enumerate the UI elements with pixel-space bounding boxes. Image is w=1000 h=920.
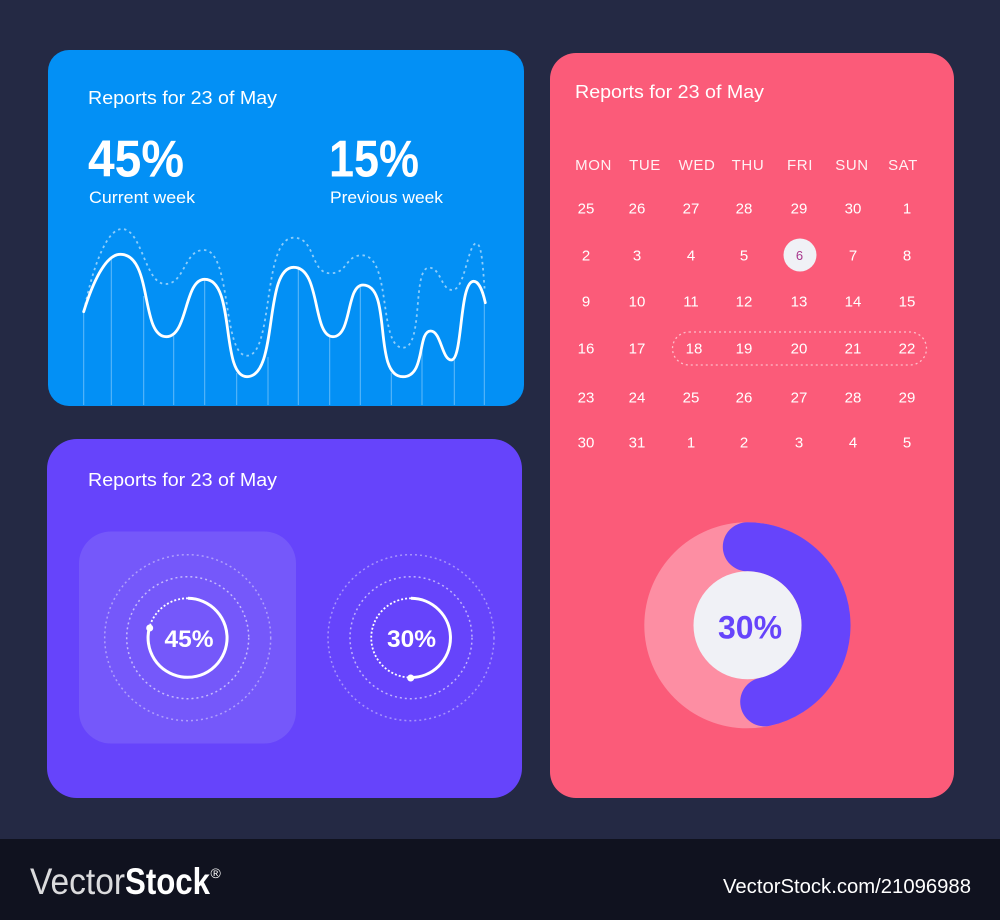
selected day marker xyxy=(784,238,816,272)
heading: purple panel: Reports for 23 of May xyxy=(88,470,277,490)
dates: 23 xyxy=(578,390,594,406)
weekday header: FRI xyxy=(787,157,813,174)
dates: 21 xyxy=(845,340,861,358)
stat: current week: Current week xyxy=(89,189,196,207)
heading: pink panel: Reports for 23 of May xyxy=(575,82,764,102)
dates: 26 xyxy=(629,200,645,218)
gauge: 30% xyxy=(328,555,494,721)
dates: 7 xyxy=(849,248,857,264)
weekday header: SAT xyxy=(888,157,918,174)
footer logo: Stock xyxy=(125,861,210,902)
stat: current week: 45% xyxy=(88,131,184,189)
dates: 12 xyxy=(736,294,752,310)
dates: 15 xyxy=(899,294,915,310)
weekday header: WED xyxy=(679,157,715,174)
stat: previous week xyxy=(329,131,444,207)
dates: 13 xyxy=(791,294,807,310)
dates: 8 xyxy=(903,248,911,264)
gauge: 30%: 30% xyxy=(387,626,436,653)
heading: blue panel: Reports for 23 of May xyxy=(88,88,277,108)
dates: 30 xyxy=(845,200,861,218)
dates: 22 xyxy=(899,340,915,358)
panel: blue line chart report xyxy=(48,50,524,406)
weekday header: TUE xyxy=(629,157,661,174)
dates: 27 xyxy=(791,390,807,406)
dates: 4 xyxy=(687,248,695,264)
registered mark: ® xyxy=(210,865,222,881)
dates: 31 xyxy=(629,434,645,452)
dates: 3 xyxy=(633,248,641,264)
stat: previous week: 15% xyxy=(329,131,419,189)
dates: 29 xyxy=(791,200,807,218)
footer logo: Vector xyxy=(30,861,125,902)
dates: 10 xyxy=(629,294,645,310)
line chart xyxy=(84,229,485,405)
dates: 4 xyxy=(849,434,857,452)
dates: 3 xyxy=(795,434,803,452)
dates: 20 xyxy=(791,340,807,358)
dates: 27 xyxy=(683,200,699,218)
dates: 25 xyxy=(683,390,699,406)
dates: 5 xyxy=(903,434,911,452)
footer logo xyxy=(30,861,210,902)
weekday header: SUN xyxy=(835,157,869,174)
dates: 29 xyxy=(899,390,915,406)
highlighted tile xyxy=(79,532,296,744)
panel: purple radial gauges xyxy=(47,439,522,798)
dates: 28 xyxy=(845,390,861,406)
dates: 17 xyxy=(629,340,645,358)
dates: 16 xyxy=(578,340,594,358)
weekday header xyxy=(575,157,918,174)
gauge: 45%: 45% xyxy=(164,626,214,653)
dates: 2 xyxy=(582,248,590,264)
weekday header: THU xyxy=(732,157,764,174)
dates: 14 xyxy=(845,294,861,310)
calendar xyxy=(575,157,926,452)
selected range outline xyxy=(672,332,926,365)
dates: 25 xyxy=(578,200,594,218)
selected day marker: 6 xyxy=(796,248,803,263)
weekday header: MON xyxy=(575,157,612,174)
footer id text: VectorStock.com/21096988 xyxy=(723,876,971,898)
dates: 9 xyxy=(582,294,590,310)
dates: 2 xyxy=(740,434,748,452)
dates: 1 xyxy=(903,200,911,218)
dates xyxy=(578,200,915,452)
dates: 18 xyxy=(686,340,702,358)
footer bar xyxy=(0,839,1000,920)
gauge: 45% xyxy=(105,555,271,721)
stat: previous week: Previous week xyxy=(330,189,444,207)
dates: 26 xyxy=(736,390,752,406)
panel: pink calendar report xyxy=(550,53,954,798)
dates: 24 xyxy=(629,390,645,406)
donut chart: 30% xyxy=(644,522,850,728)
dates: 30 xyxy=(578,434,594,452)
dates: 28 xyxy=(736,200,752,218)
dates: 19 xyxy=(736,340,752,358)
donut chart: 30%: 30% xyxy=(718,610,782,646)
dates: 11 xyxy=(683,294,699,310)
dates: 5 xyxy=(740,248,748,264)
dates: 1 xyxy=(687,434,695,452)
